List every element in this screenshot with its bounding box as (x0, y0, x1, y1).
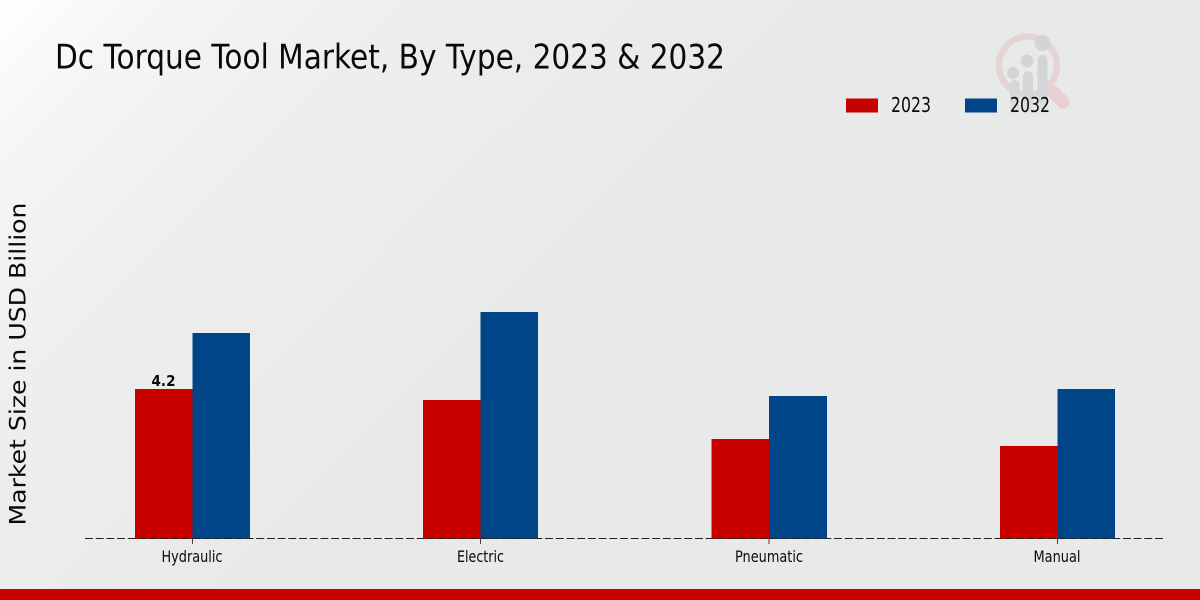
legend label: 2032: 2032 (1010, 93, 1050, 117)
legend swatch: 2023 (846, 98, 878, 112)
category label: Electric: Electric (457, 547, 504, 566)
bars: Pneumatic (712, 396, 827, 539)
title: Dc Torque Tool Market, By Type, 2023 & 2032 (55, 38, 725, 76)
data label: 4.2: 4.2 (152, 372, 176, 390)
watermark logo (999, 35, 1063, 116)
category label: Hydraulic: Hydraulic (162, 547, 222, 566)
bars: Manual (1000, 389, 1115, 539)
bars: Hydraulic (135, 333, 250, 539)
legend (846, 93, 1050, 117)
legend label: 2023: 2023 (891, 93, 931, 117)
legend swatch: 2032 (965, 98, 997, 112)
bar chart (85, 312, 1165, 566)
bars: Electric (423, 312, 538, 539)
category label: Pneumatic: Pneumatic (735, 547, 803, 566)
bottom bar (0, 589, 1200, 600)
x-axis baseline (85, 538, 1165, 540)
y-axis label: Market Size in USD Billion (6, 202, 32, 526)
category label: Manual: Manual (1034, 547, 1080, 566)
